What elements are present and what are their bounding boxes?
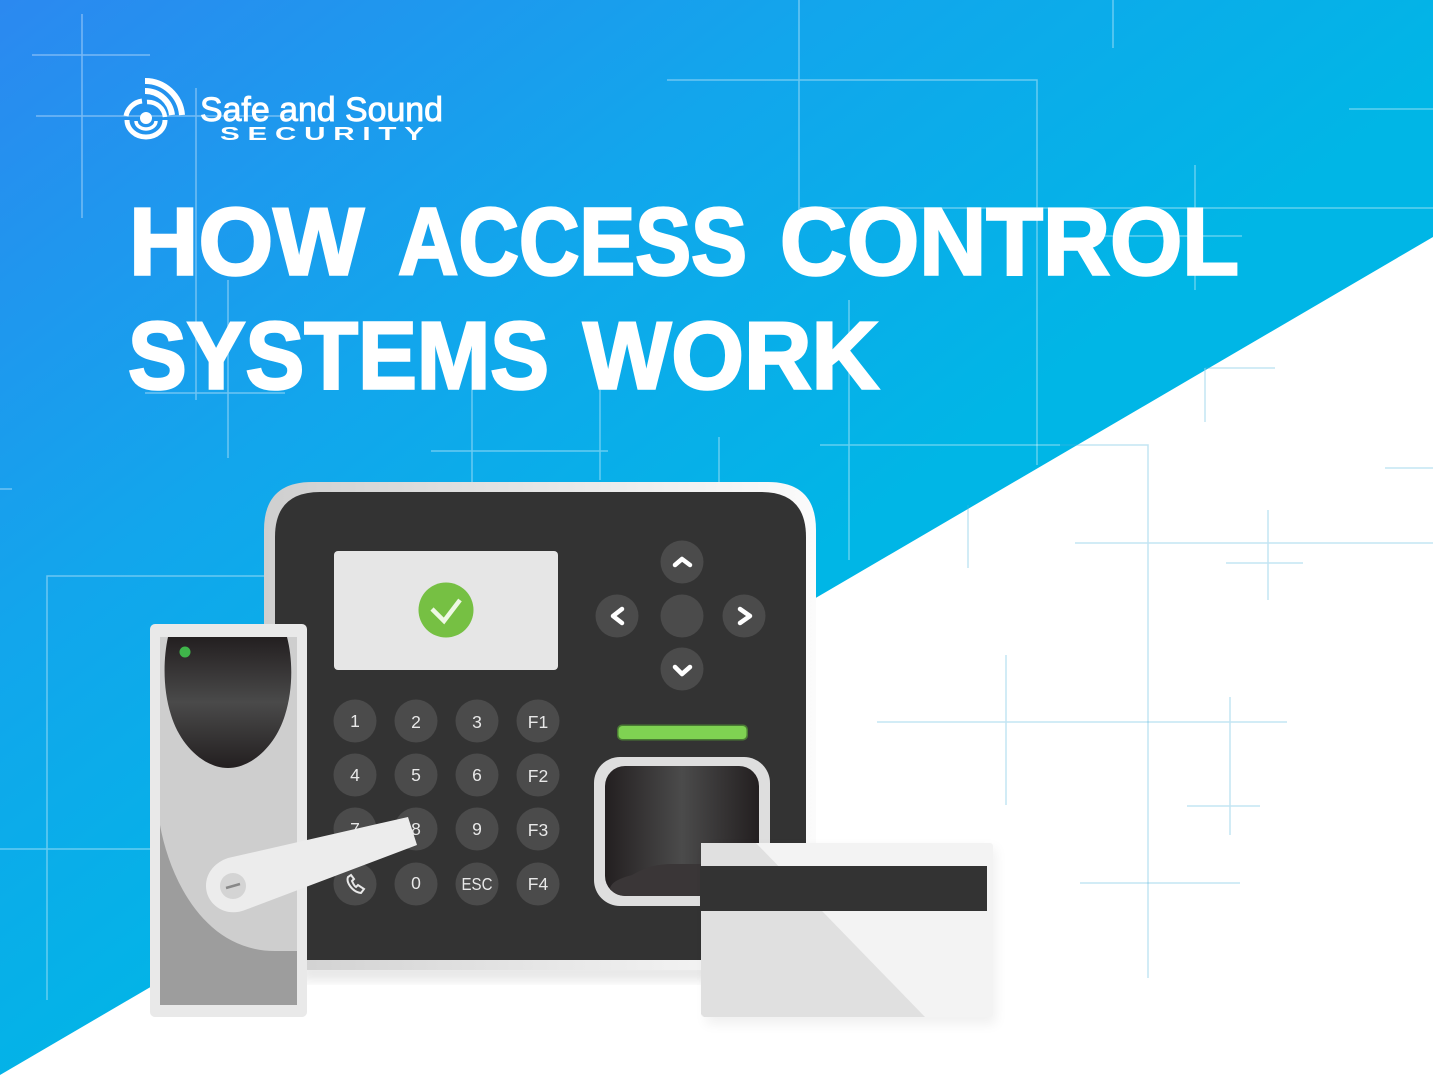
card shaded area: [701, 843, 925, 1017]
keypad: F3: [528, 820, 548, 840]
logo: [126, 81, 443, 144]
keypad: 1: [350, 711, 360, 731]
lock inner panel: [160, 637, 297, 1005]
logo tagline: SECURITY: [220, 124, 425, 144]
title: ACCESS: [398, 189, 747, 296]
keypad: 3: [472, 712, 482, 732]
access control terminal: [264, 482, 816, 980]
keypad: F1: [528, 712, 548, 732]
terminal casing: [264, 482, 816, 970]
keypad: 9: [472, 819, 482, 839]
logo name: Safe and Sound: [200, 91, 443, 129]
keypad: ESC: [462, 874, 492, 894]
display screen: [334, 551, 558, 670]
navigation pad: [596, 540, 766, 690]
keyhole: [220, 873, 246, 899]
keypad: 0: [411, 873, 421, 893]
lock plate: [150, 624, 307, 1017]
keypad: F4: [528, 874, 548, 894]
card shadow: [706, 848, 996, 1024]
door lock: [150, 624, 417, 1017]
keypad: 7: [350, 819, 360, 839]
icon: phone: [348, 875, 364, 893]
title: [128, 189, 1239, 410]
magnetic key card: [700, 843, 996, 1024]
terminal shadow: [300, 964, 720, 980]
icon: green check: [418, 582, 474, 638]
circuit lines on white area: [877, 368, 1433, 978]
title: HOW: [129, 189, 364, 296]
keypad: 8: [411, 819, 421, 839]
title: SYSTEMS: [128, 303, 549, 410]
title: CONTROL: [780, 189, 1239, 296]
keypad: 5: [411, 765, 421, 785]
card body: [701, 843, 993, 1017]
title: WORK: [583, 303, 879, 410]
icon: wifi lock: [126, 81, 182, 137]
magnetic stripe: [700, 866, 987, 911]
lock lower shade: [160, 825, 297, 1005]
keypad: 6: [472, 765, 482, 785]
keypad: 4: [350, 765, 360, 785]
sensor dome: [165, 637, 291, 768]
fingerprint scanner: [594, 757, 770, 906]
lever handle: [206, 817, 417, 912]
keypad: F2: [528, 766, 548, 786]
terminal face: [275, 492, 806, 960]
keypad: [334, 700, 560, 906]
green status bar: [617, 724, 748, 740]
keypad: 2: [411, 712, 421, 732]
green LED: [180, 646, 190, 658]
